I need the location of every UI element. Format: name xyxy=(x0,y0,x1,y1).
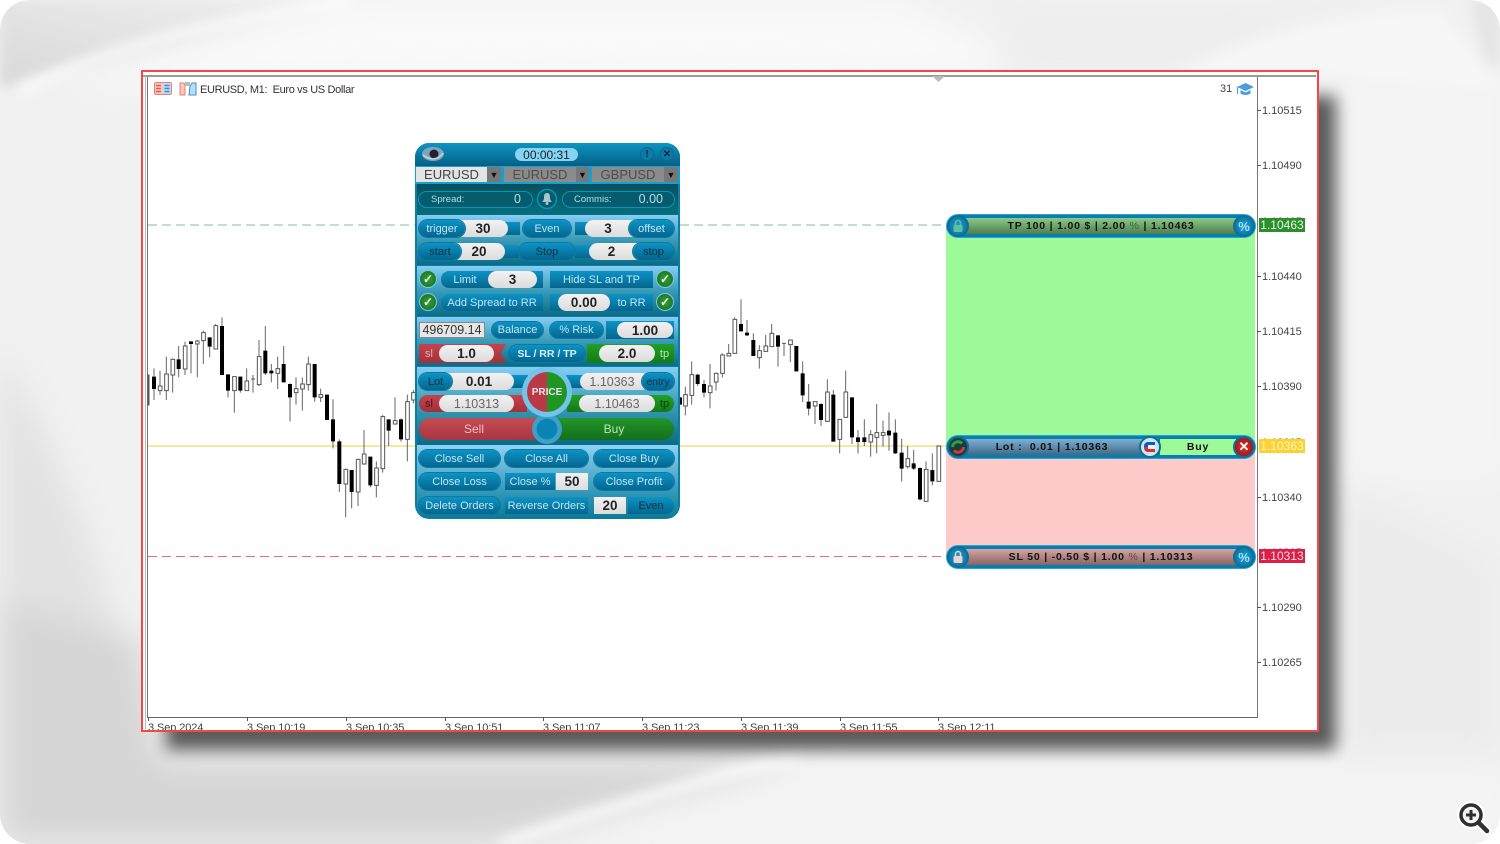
price circle xyxy=(522,367,572,417)
button: stop xyxy=(633,243,674,260)
price axis labels: 1.10290 xyxy=(1262,602,1302,614)
info button xyxy=(640,147,654,161)
button: Balance xyxy=(492,322,543,338)
label: Spread: xyxy=(431,194,464,205)
price axis labels xyxy=(416,105,1302,669)
text: tp: tp xyxy=(660,348,669,360)
input: stop value: 2 xyxy=(608,244,615,259)
button: Lot: Lot xyxy=(428,376,443,388)
input: even value: 20 xyxy=(602,498,618,513)
text: tp: tp xyxy=(660,398,669,410)
tab: EURUSD active: EURUSD xyxy=(424,167,479,182)
button: Close All: Close All xyxy=(525,452,568,464)
ribbon xyxy=(575,245,595,258)
text: sl: sl xyxy=(425,348,433,360)
toggle: limit: ✓ xyxy=(423,272,433,286)
ribbon xyxy=(500,222,520,235)
red outline around chart window xyxy=(141,70,1319,732)
button: Close All xyxy=(505,450,588,467)
icon: close xyxy=(1233,436,1255,458)
button: Close Sell xyxy=(419,450,500,467)
icon: percent xyxy=(1233,215,1255,237)
button: Even xyxy=(628,497,674,514)
button: offset: offset xyxy=(638,222,665,234)
input: lot value xyxy=(440,373,514,390)
ribbon xyxy=(575,222,595,235)
toggle: limit xyxy=(419,270,437,288)
text: sl: sl xyxy=(425,398,433,410)
input: offset value xyxy=(585,220,645,237)
icon: bell xyxy=(536,188,558,210)
input: RR value: 0.00 xyxy=(571,295,597,310)
section: order entry xyxy=(417,367,678,445)
input: trigger value: 30 xyxy=(475,221,491,236)
button: start xyxy=(419,243,461,260)
button: Even: Even xyxy=(534,222,560,234)
chart window xyxy=(141,71,1319,732)
icon: percent: % xyxy=(1238,218,1250,234)
input: entry price xyxy=(580,373,650,390)
price axis labels: 1.10390 xyxy=(1262,381,1302,393)
input: risk value: 1.00 xyxy=(632,322,658,338)
timer: 00:00:31 xyxy=(523,148,570,162)
tab: EURUSD: EURUSD xyxy=(513,167,567,182)
icon: eye xyxy=(422,147,444,161)
input: sl value xyxy=(439,345,494,362)
commission pill xyxy=(562,191,675,208)
icon: percent xyxy=(1233,546,1255,568)
bar label: TP 100 | 1.00 $ | 2.00 | 1.10463 xyxy=(1007,220,1195,232)
take profit zone xyxy=(946,226,1255,446)
ribbon: sl xyxy=(419,344,506,363)
button: trigger xyxy=(419,220,465,237)
toggle: to RR: ✓ xyxy=(660,295,670,309)
icon: chart template xyxy=(180,82,196,96)
button: to RR xyxy=(550,294,653,311)
tab: GBPUSD: GBPUSD xyxy=(601,167,655,182)
input: balance: 496709.14 xyxy=(422,323,482,337)
input: close percent xyxy=(556,473,588,490)
input: start value: 20 xyxy=(471,244,487,259)
entry bar xyxy=(947,436,1255,458)
icon: percent: % xyxy=(1238,550,1250,564)
bar label: % xyxy=(1128,551,1139,563)
button: trigger: trigger xyxy=(426,222,458,234)
circle halves: PRICE xyxy=(532,386,562,398)
countdown and graduation cap icon xyxy=(1220,83,1254,95)
spread and commission row xyxy=(417,184,678,215)
button: Hide SL and TP: Hide SL and TP xyxy=(563,274,640,286)
button: Hide SL and TP xyxy=(550,271,653,288)
button: Even: Even xyxy=(638,500,664,512)
icon: lock xyxy=(947,546,969,568)
ribbon: target price xyxy=(567,395,674,412)
circle halves xyxy=(527,372,567,412)
button: Close Profit xyxy=(594,473,674,490)
candles left of the panel xyxy=(148,317,415,517)
button: Limit: Limit xyxy=(453,274,477,286)
button: stop: stop xyxy=(643,246,664,258)
tab arrow xyxy=(664,167,678,182)
info button: ! xyxy=(645,148,649,160)
price axis labels: 1.10490 xyxy=(1262,160,1302,172)
tab arrow xyxy=(576,167,589,182)
bar label xyxy=(965,218,1237,234)
button: Limit xyxy=(441,271,543,288)
price axis labels: 1.10515 xyxy=(1262,105,1302,117)
toggle: add spread: ✓ xyxy=(423,295,433,309)
section: balance and risk xyxy=(417,317,678,366)
button: Balance: Balance xyxy=(498,324,537,336)
price axis labels: 1.10265 xyxy=(1262,657,1302,669)
input: stop value xyxy=(589,243,644,260)
button: Close Loss: Close Loss xyxy=(432,476,487,488)
price axis labels: 1.10465 xyxy=(1262,216,1302,228)
buy label xyxy=(1160,439,1236,455)
title bar xyxy=(415,143,680,166)
price axis labels: 1.10365 xyxy=(1262,437,1302,449)
ribbon and input: risk value xyxy=(606,321,674,339)
drop shadow of the chart window xyxy=(166,96,1336,750)
button: Buy: Buy xyxy=(604,422,624,436)
label: Commis: xyxy=(574,194,611,205)
input: start value xyxy=(440,243,505,260)
close button xyxy=(660,147,674,161)
input: tp value: 2.0 xyxy=(618,346,636,361)
icon: magnet xyxy=(1139,436,1161,458)
bar label: Lot : 0.01 | 1.10363 xyxy=(996,441,1108,453)
text: symbol and timeframe: EURUSD, M1: Euro vs US Dollar xyxy=(200,84,354,96)
input: risk value xyxy=(617,322,673,338)
section: trigger and trailing xyxy=(417,215,678,265)
stop loss zone xyxy=(946,446,1255,556)
button: % Risk xyxy=(550,322,603,338)
button: SL / RR / TP: SL / RR / TP xyxy=(517,348,577,360)
section: close actions xyxy=(417,445,678,518)
button: Close % xyxy=(505,473,555,490)
button: % Risk: % Risk xyxy=(559,324,594,336)
input: entry price: 1.10363 xyxy=(589,374,635,388)
bar label xyxy=(965,439,1145,455)
bar label xyxy=(965,549,1237,565)
button: offset xyxy=(629,220,674,237)
button: Delete Orders xyxy=(419,497,500,514)
panel: trade control xyxy=(415,143,680,519)
button: Add Spread to RR: Add Spread to RR xyxy=(447,296,537,308)
input: stop price xyxy=(439,395,514,412)
input: limit value: 3 xyxy=(509,272,516,287)
button: Sell xyxy=(419,418,544,440)
button: SL / RR / TP xyxy=(509,345,585,362)
button: Close Loss xyxy=(419,473,500,490)
price axis labels: 1.10340 xyxy=(1262,492,1302,504)
toggle: to RR xyxy=(656,293,674,311)
input: sl value: 1.0 xyxy=(457,346,476,361)
button: Reverse Orders xyxy=(505,497,588,514)
symbol tabs xyxy=(415,166,680,184)
button: Close Buy xyxy=(594,450,674,467)
tab arrow: ▼ xyxy=(490,170,498,180)
ribbon: lot xyxy=(500,375,528,388)
text: candle countdown: 31 xyxy=(1220,83,1232,95)
price axis labels: 1.10315 xyxy=(1262,547,1302,559)
button: entry xyxy=(642,373,674,390)
input: target price xyxy=(579,395,655,412)
price axis labels: 1.10440 xyxy=(1262,271,1302,283)
value: 0.00 xyxy=(639,192,663,206)
input: stop price: 1.10313 xyxy=(454,396,499,410)
tab arrow xyxy=(487,167,501,182)
price axis labels: 1.10415 xyxy=(1262,326,1302,338)
input: RR value xyxy=(558,294,610,311)
toggle: hide xyxy=(656,270,674,288)
button: Reverse Orders: Reverse Orders xyxy=(508,500,585,512)
input: limit value xyxy=(488,271,537,288)
icon: zoom magnifier xyxy=(1457,801,1491,836)
button: Even xyxy=(523,220,571,237)
button: Sell: Sell xyxy=(464,422,484,436)
button: Close %: Close % xyxy=(510,476,550,488)
icon: order list xyxy=(154,82,172,95)
input: even value xyxy=(594,497,626,514)
ribbon xyxy=(495,245,519,258)
buy label: Buy xyxy=(1187,441,1209,453)
button: Close Sell: Close Sell xyxy=(435,452,484,464)
take profit bar xyxy=(947,215,1255,237)
button: Buy xyxy=(550,418,674,440)
input: offset value: 3 xyxy=(604,221,612,236)
input: target price: 1.10463 xyxy=(594,396,640,410)
time axis labels xyxy=(148,717,995,730)
icon: close: ✕ xyxy=(1239,439,1249,454)
icon: graduation cap xyxy=(1236,83,1254,95)
stop loss bar xyxy=(947,546,1255,568)
section: limit and risk-reward options xyxy=(417,266,678,316)
button: Delete Orders: Delete Orders xyxy=(425,500,494,512)
candles right of the panel xyxy=(678,299,941,502)
button: Add Spread to RR xyxy=(441,294,543,311)
button: Stop xyxy=(519,243,575,260)
button: Close Buy: Close Buy xyxy=(609,452,659,464)
close button: ✕ xyxy=(663,148,671,160)
button: Stop: Stop xyxy=(536,246,558,258)
price tag: stop loss: 1.10313 xyxy=(1260,549,1304,563)
center knob xyxy=(532,414,562,444)
input: trigger value xyxy=(440,220,508,237)
icon: refresh xyxy=(947,436,969,458)
bar label: % xyxy=(1130,220,1140,232)
button: Close Profit: Close Profit xyxy=(606,476,662,488)
input: close percent: 50 xyxy=(564,474,580,489)
tab arrow: ▼ xyxy=(578,170,587,180)
spread pill xyxy=(418,191,533,208)
input: tp value xyxy=(599,345,655,362)
button: entry: entry xyxy=(646,376,670,388)
toggle: hide: ✓ xyxy=(660,272,670,286)
tab arrow: ▼ xyxy=(667,170,675,180)
button: Lot xyxy=(419,373,452,390)
button: to RR: to RR xyxy=(617,296,646,308)
ribbon: entry xyxy=(566,375,596,388)
chart title xyxy=(154,82,354,96)
ribbon: tp xyxy=(587,344,674,363)
input: lot value: 0.01 xyxy=(466,374,492,389)
icon: lock xyxy=(947,215,969,237)
bar label: SL 50 | -0.50 $ | 1.00 | 1.10313 xyxy=(1009,551,1193,563)
price tag: entry: 1.10363 xyxy=(1260,439,1304,453)
button: start: start xyxy=(429,246,451,258)
ribbon: stop price xyxy=(419,395,527,412)
value: 0 xyxy=(514,192,521,206)
price tag: take profit: 1.10463 xyxy=(1260,218,1304,232)
toggle: add spread xyxy=(419,293,437,311)
